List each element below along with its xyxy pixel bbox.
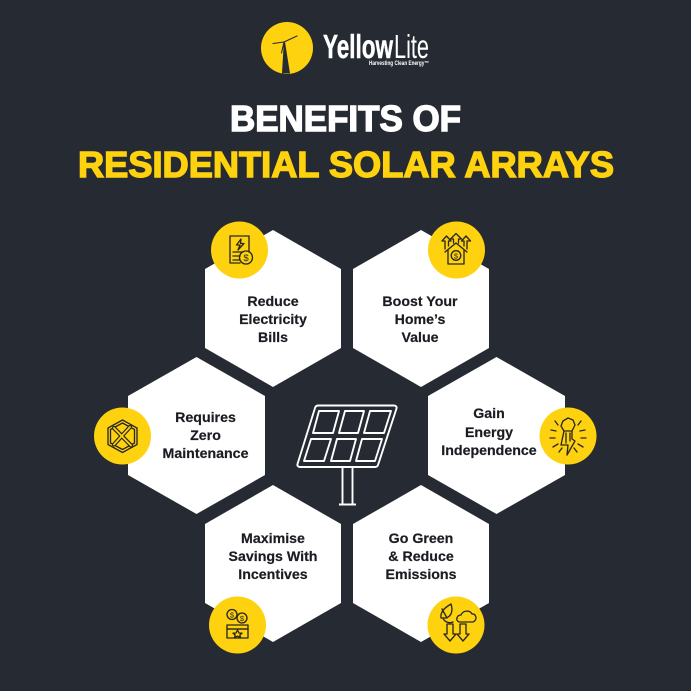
logo tagline: Harvesting Clean Energy™ [369,60,429,67]
icon: home value: $ [454,252,459,260]
panel text: Zero [190,428,221,444]
panel text: Incentives [238,567,308,583]
panel: Go Green & Reduce Emissions [353,485,489,654]
panel text: Value [401,330,439,346]
icon: solar panel [297,406,397,504]
panel text: Emissions [386,567,457,583]
title [78,98,614,185]
title line 2: RESIDENTIAL SOLAR ARRAYS [78,144,614,185]
panel: Maximise Savings With Incentives [205,485,341,654]
panel text: Reduce [247,294,299,310]
panel text: Independence [441,443,537,459]
panel text: Maintenance [163,446,249,462]
icon: wind turbine [261,22,313,74]
icon: incentives: $ [240,614,245,623]
icon: electricity bill [211,222,268,278]
panel text: Go Green [389,531,453,547]
panel text: Requires [175,410,236,426]
icon: energy fist [540,408,596,464]
panel: Gain Energy Independence [428,357,596,514]
panel text: Maximise [241,531,305,547]
logo wordmark: Yellow [323,28,393,65]
icon: incentives: $ [230,610,235,620]
panel text: & Reduce [388,549,454,565]
icon: green emissions [428,596,484,654]
panel text: Electricity [239,312,307,328]
panel text: Boost Your [382,294,458,310]
icon: home value [428,222,485,278]
panel text: Gain [473,406,505,422]
panel text: Home’s [395,312,445,328]
panel: Reduce Electricity Bills [205,222,341,387]
icon: electricity bill: $ [243,253,249,264]
panel text: Bills [258,330,288,346]
logo: YellowLite [261,22,429,74]
icon: tools [94,408,151,464]
panel: Boost Your Home's Value [353,222,489,387]
panel text: Energy [465,425,513,441]
panel text: Savings With [229,549,317,565]
title line 1: BENEFITS OF [230,98,461,139]
icon: incentives [209,596,266,654]
panel: Requires Zero Maintenance [94,357,265,514]
logo: YellowLite: Lite [394,28,429,65]
